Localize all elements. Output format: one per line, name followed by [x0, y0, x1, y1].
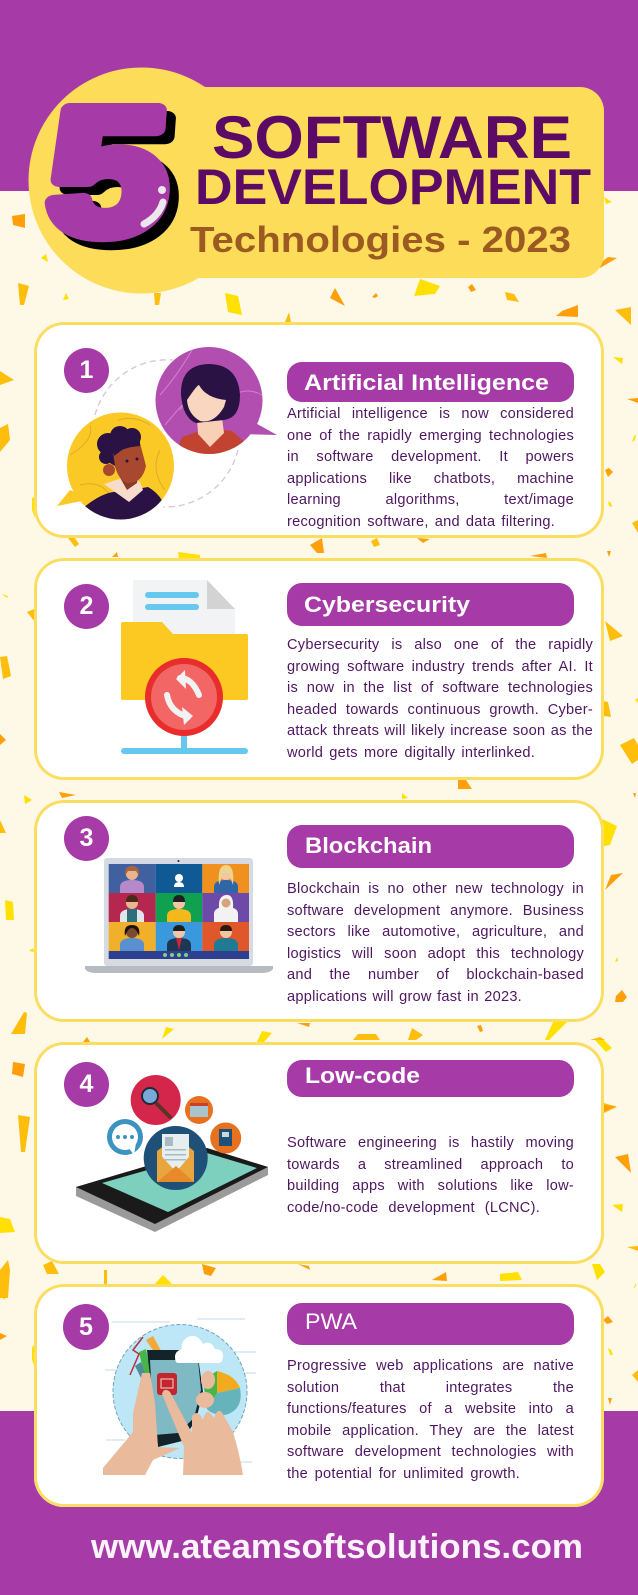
description: mobile application. They are the latest: [287, 1422, 574, 1438]
number 1: [64, 348, 109, 393]
description: applications like chatbots, machine: [287, 470, 574, 486]
number 3: 3: [80, 824, 93, 852]
description: [287, 881, 584, 1004]
description: learning algorithms, text/image: [287, 492, 574, 508]
heading: artificial intelligence: [287, 362, 574, 402]
heading: cybersecurity: [287, 583, 574, 626]
title line: development: DEVELOPMENT: [195, 159, 591, 215]
big number five: 5: [51, 80, 184, 279]
description: software development anymore. Business: [287, 902, 584, 918]
description: and the number of blockchain-based: [287, 967, 584, 983]
heading: artificial intelligence: Artificial Intelligence: [304, 370, 549, 395]
description: Cybersecurity is also one of the rapidly: [287, 637, 593, 653]
description: software development technologies with: [287, 1444, 574, 1460]
illustration: laptop video call: [85, 858, 273, 973]
description: [287, 1135, 574, 1216]
number 3: [64, 816, 109, 861]
title line: software: SOFTWARE: [212, 104, 572, 171]
number 5: 5: [79, 1313, 93, 1341]
description: the potential for unlimited growth.: [287, 1466, 520, 1482]
description: headed towards continuous growth. Cyber-: [287, 702, 593, 718]
heading: pwa: [287, 1303, 574, 1345]
illustration: two people in speech bubbles: [57, 347, 277, 520]
big number five: 5: [42, 72, 175, 271]
panel: low-code: [34, 1042, 604, 1264]
description: Progressive web applications are native: [287, 1358, 574, 1374]
subtitle: Technologies - 2023: [190, 219, 571, 260]
number 1: 1: [80, 356, 93, 384]
heading: low-code: [287, 1060, 574, 1097]
description: world gets more digitally interlinked.: [287, 744, 535, 760]
description: solution that integrates the: [287, 1380, 574, 1396]
description: attack threats will likely increase soon as the: [287, 723, 593, 739]
description: code/no-code development (LCNC).: [287, 1200, 540, 1216]
title banner: [28, 68, 604, 294]
illustration: phone with app bubbles: [76, 1075, 268, 1232]
banner shape: [28, 68, 604, 294]
description: in software development. It powers: [287, 449, 574, 465]
description: [287, 1358, 574, 1482]
icon: folder with sync: [121, 580, 248, 754]
description: Blockchain is no other new technology in: [287, 881, 584, 897]
website footer: www.ateamsoftsolutions.com: [90, 1528, 583, 1566]
description: growing software industry trends after AI. It: [287, 658, 593, 674]
description: [287, 406, 574, 530]
number 4: [64, 1062, 109, 1107]
description: functions/features of a website into a: [287, 1401, 574, 1417]
description: building apps with solutions like low-: [287, 1178, 574, 1194]
description: applications will grow fast in 2023.: [287, 988, 522, 1004]
description: is now in the list of software technologies: [287, 680, 593, 696]
number 5: [63, 1304, 109, 1350]
five highlights: [144, 186, 166, 224]
description: one of the rapidly emerging technologies: [287, 428, 574, 444]
description: Software engineering is hastily moving: [287, 1135, 574, 1151]
description: towards a streamlined approach to: [287, 1156, 574, 1172]
heading: cybersecurity: Cybersecurity: [304, 592, 471, 617]
panel: blockchain: [34, 800, 604, 1022]
description: logistics will soon adopt this technology: [287, 946, 584, 962]
heading: blockchain: Blockchain: [305, 833, 432, 858]
number 4: 4: [80, 1070, 93, 1098]
heading: low-code: Low-code: [305, 1063, 420, 1088]
heading: blockchain: [287, 825, 574, 868]
illustration: hands holding phone: [103, 1318, 256, 1475]
number 2: 2: [80, 592, 93, 620]
description: recognition software, and data filtering.: [287, 514, 555, 530]
description: sectors like automotive, agriculture, and: [287, 924, 584, 940]
description: [287, 637, 593, 760]
panel: pwa: [34, 1284, 604, 1507]
description: Artificial intelligence is now considered: [287, 406, 574, 422]
panel: cybersecurity: [34, 558, 604, 780]
number 2: [64, 584, 109, 629]
panel: artificial intelligence: [34, 322, 604, 538]
heading: pwa: PWA: [305, 1309, 357, 1334]
